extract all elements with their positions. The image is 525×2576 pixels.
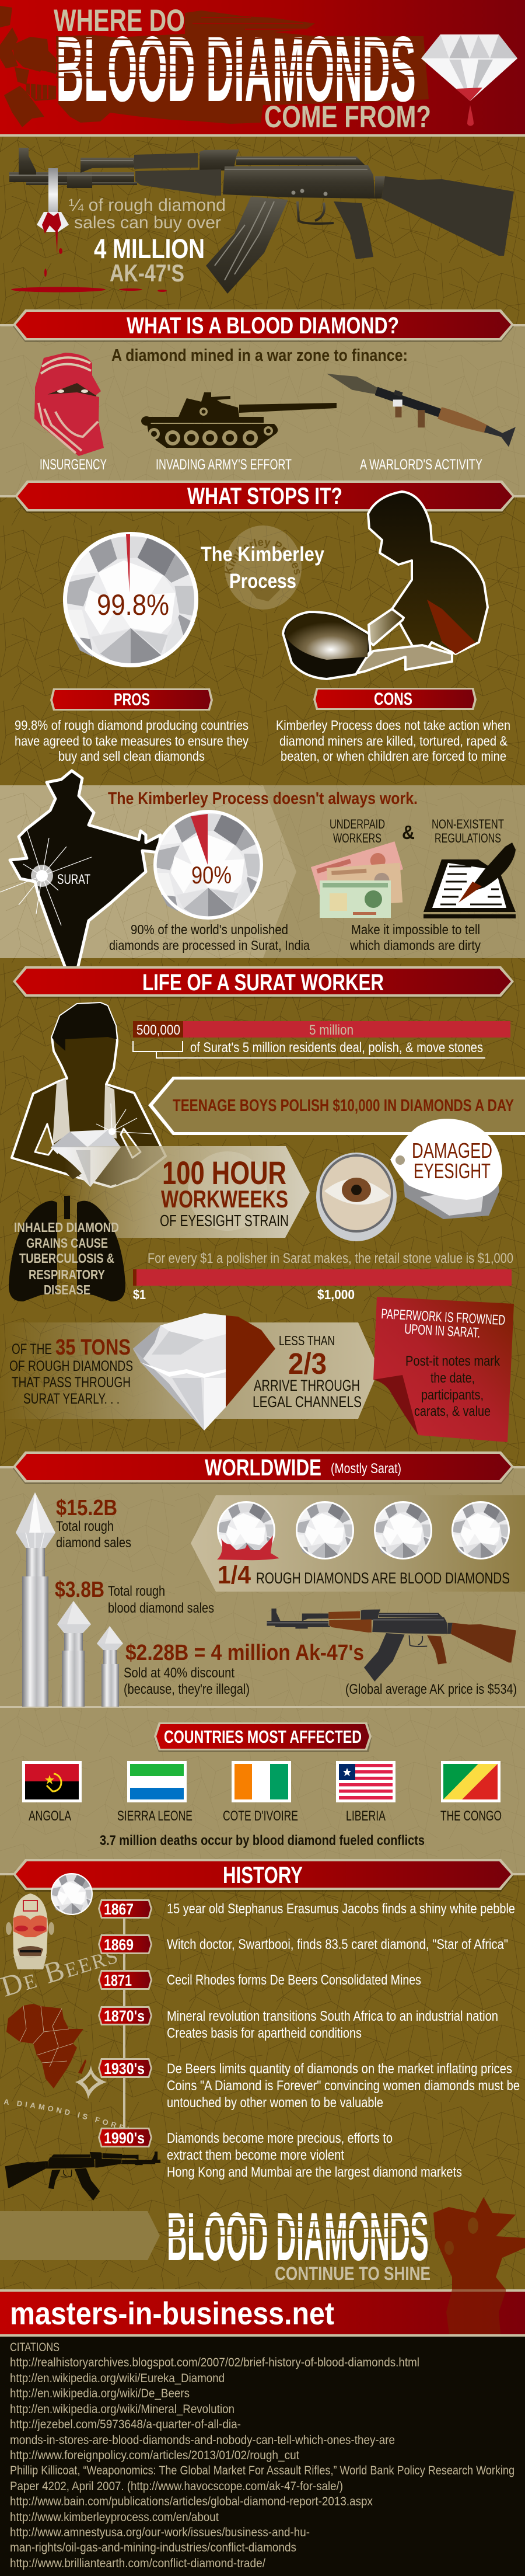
caption: impossible to tell <box>349 922 481 953</box>
callout: sticky note on paperwork: UPON IN SARAT. <box>404 1321 481 1341</box>
caption: 90% processed in surat: diamonds are processed in Surat, India <box>109 938 310 953</box>
chart: 500,000 of 5 million: 5 million <box>309 1022 354 1038</box>
caption: three uses: INVADING ARMY'S EFFORT <box>156 457 292 473</box>
timeline: 1990's: 1990's <box>104 2129 145 2147</box>
banner: worldwide: WORLDWIDE <box>205 1455 321 1481</box>
timeline: 1871: 1871 <box>104 1972 132 1989</box>
stat: diamond sales text: diamond sales <box>56 1535 131 1551</box>
icon: small diamond <box>51 1874 92 1914</box>
callout: sticky note on paperwork: carats, & value <box>414 1404 491 1419</box>
callout: sticky note on paperwork: Post-it notes mark <box>405 1353 501 1369</box>
banner: countries most affected: COUNTRIES MOST AFFECTED <box>164 1726 362 1747</box>
icon: bleeding diamond <box>421 34 517 126</box>
timeline: 1990's: Hong Kong and Mumbai are the largest diamond markets <box>167 2164 462 2180</box>
labels: underpaid workers and regulations: UNDERPAID <box>330 817 385 831</box>
banner: what stops it <box>15 481 515 513</box>
citations: Paper 4202, April 2007. (http://www.havocscope.com/ak-47-for-sale/) <box>10 2480 343 2493</box>
flag: the congo <box>440 1761 502 1824</box>
caption: 90% processed in surat <box>109 922 310 953</box>
footer banner: masters-in-business.net <box>10 2295 334 2331</box>
timeline: 1930's: untouched by other women to be valuable <box>167 2095 383 2111</box>
panel: 35 tons, less than 2/3: SURAT YEARLY. . . <box>23 1391 120 1407</box>
panel: 35 tons, less than 2/3: LEGAL CHANNELS <box>253 1393 362 1411</box>
callout: 100 hour workweeks: OF EYESIGHT STRAIN <box>160 1212 289 1230</box>
hero text: AK-47'S <box>110 259 184 287</box>
timeline: 1869: 1869 <box>104 1936 134 1954</box>
icon: lungs with text <box>9 1196 125 1301</box>
icon: worker silhouette holding diamond <box>12 1003 166 1187</box>
labels: underpaid workers and regulations: REGULATIONS <box>435 831 501 845</box>
timeline: 1990's <box>98 2128 462 2180</box>
map: india with surat burst: SURAT <box>57 872 90 887</box>
heading: the kimberley process: Process <box>229 570 296 593</box>
banner: what stops it: WHAT STOPS IT? <box>187 483 342 509</box>
stat: diamond sales text: Total rough <box>108 1583 165 1599</box>
flag: the congo: THE CONGO <box>440 1808 502 1824</box>
kimberley process seal: Kimberley Process <box>224 538 300 575</box>
citations: http://www.kimberleyprocess.com/en/about <box>10 2511 219 2524</box>
panel: cons <box>276 688 510 764</box>
panel: kimberley process fails: The Kimberley Process doesn't always work. <box>108 789 418 808</box>
citations <box>0 2337 525 2576</box>
icon: lungs with text: RESPIRATORY <box>29 1267 105 1282</box>
hero: AK-47 illustration <box>9 148 514 294</box>
icon: four point diamond star <box>75 2065 107 2099</box>
citations: http://jezebel.com/5973648/a-quarter-of-all-dia- <box>10 2418 241 2431</box>
section background: what is a blood diamond <box>0 324 525 497</box>
flag: sierra leone: SIERRA LEONE <box>117 1808 192 1824</box>
stat: diamond sales text: Total rough <box>56 1519 114 1534</box>
icon: tribal mask <box>6 1893 54 1969</box>
caption: three uses <box>40 457 482 473</box>
icon: jeweller's loupe with eye <box>316 1119 502 1241</box>
icon: child panning silhouette <box>283 492 488 679</box>
banner: history <box>13 1859 514 1892</box>
citations: http://realhistoryarchives.blogspot.com/2007/02/brief-history-of-blood-diamonds.html <box>10 2356 419 2369</box>
icon: 90% diamond: 90% <box>191 861 232 889</box>
icon: lungs with text: GRAINS CAUSE <box>26 1235 108 1251</box>
panel: 35 tons, less than 2/3: LESS THAN <box>279 1333 335 1348</box>
callout: sticky note on paperwork: participants, <box>421 1387 484 1403</box>
caption: three uses: INSURGENCY <box>40 457 107 473</box>
icon: lungs with text: DISEASE <box>44 1282 90 1297</box>
panel: 35 tons, less than 2/3: 2/3 <box>288 1347 327 1380</box>
timeline: 1869 <box>98 1934 508 1954</box>
icon: 90% diamond <box>155 812 262 918</box>
citations: http://www.foreignpolicy.com/articles/2013/01/02/rough_cut <box>10 2449 299 2462</box>
timeline: 1870's <box>98 2006 498 2041</box>
chart: $1 vs $1,000 <box>133 1251 513 1302</box>
banner: what is a blood diamond <box>13 309 514 342</box>
caption: impossible to tell: Make it impossible to tell <box>351 922 480 937</box>
callout: 100 hour workweeks: WORKWEEKS <box>161 1185 288 1213</box>
citations: http://www.brilliantearth.com/conflict-diamond-trade/ <box>10 2557 265 2570</box>
timeline: 1867: 1867 <box>104 1900 134 1918</box>
panel: 35 tons, less than 2/3: THAT PASS THROUGH <box>12 1374 131 1391</box>
banner: countries most affected <box>154 1722 372 1752</box>
caption: 90% processed in surat: 90% of the world's unpolished <box>131 922 288 937</box>
title <box>54 4 431 134</box>
closing title: CONTINUE TO SHINE <box>275 2263 430 2284</box>
stat: 3.7 million deaths: 3.7 million deaths occur by blood diamond fueled conflicts <box>100 1833 425 1849</box>
panel: kimberley process fails <box>0 785 525 958</box>
icon: rupee notes <box>311 841 403 918</box>
panel: 35 tons, less than 2/3: OF THE <box>12 1341 52 1357</box>
icon: lungs with text: TUBERCULOSIS & <box>19 1251 114 1266</box>
title: WHERE DO <box>54 4 185 38</box>
timeline: 1871 <box>98 1970 421 1990</box>
chart: diamond-tipped bullets <box>16 1492 123 1707</box>
icon: colored AK-47 <box>267 1609 516 1682</box>
heading: the kimberley process: The Kimberley <box>201 543 324 566</box>
stat: diamond sales text: $15.2B <box>56 1496 117 1520</box>
arc text: a diamond is forever <box>4 2100 129 2128</box>
stat: diamond sales text: $3.8B <box>55 1578 104 1602</box>
stat: diamond sales text: $2.28B = 4 million Ak-47's <box>125 1641 364 1665</box>
arc text: a diamond is forever: A DIAMOND IS FOREVER <box>4 2100 129 2128</box>
panel: 35 tons, less than 2/3: OF ROUGH DIAMONDS <box>9 1358 133 1374</box>
chart: $1 vs $1,000: $1 <box>133 1287 146 1302</box>
citations: http://en.wikipedia.org/wiki/Eureka_Diamond <box>10 2372 225 2385</box>
icon: jeweller's loupe with eye: EYESIGHT <box>414 1159 491 1183</box>
section background: worldwide <box>0 1466 525 1875</box>
panel: pros <box>15 688 249 764</box>
citations: man-rights/oil-gas-and-mining-industries/conflict-diamonds <box>10 2541 296 2554</box>
panel: pros: PROS <box>114 690 150 709</box>
timeline: 1870's: Creates basis for apartheid conditions <box>167 2025 362 2041</box>
callout: sticky note on paperwork: the date, <box>430 1370 475 1386</box>
hero text <box>69 196 226 287</box>
caption: three uses: A WARLORD'S ACTIVITY <box>360 457 482 473</box>
icon: black AK silhouette <box>5 2152 160 2201</box>
icon: rocket launcher <box>320 363 516 458</box>
banner: life of a surat worker: LIFE OF A SURAT WORKER <box>142 970 384 995</box>
chart: 500,000 of 5 million: 500,000 <box>136 1022 180 1038</box>
flag: cote d'ivoire: COTE D'IVOIRE <box>223 1808 298 1824</box>
arrow: bottom tan pointer <box>0 2211 160 2260</box>
subheading: a diamond mined: A diamond mined in a war zone to finance: <box>111 346 408 365</box>
banner: worldwide <box>13 1451 514 1484</box>
timeline: 1867 <box>98 1899 515 1919</box>
panel: one in four diamonds: 1/4 <box>218 1561 251 1589</box>
citations: http://en.wikipedia.org/wiki/Mineral_Revolution <box>10 2403 235 2416</box>
callout: sticky note on paperwork <box>373 1297 514 1442</box>
panel: pros: buy and sell clean diamonds <box>58 749 205 764</box>
panel: 35 tons, less than 2/3 <box>0 1313 379 1430</box>
callout: 100 hour workweeks <box>64 1146 310 1238</box>
caption: impossible to tell: which diamonds are dirty <box>349 938 481 953</box>
labels: underpaid workers and regulations: & <box>402 821 415 843</box>
hero text: sales can buy over <box>74 213 221 232</box>
panel: one in four diamonds <box>191 1495 525 1592</box>
timeline: 1930's <box>98 2058 520 2111</box>
citations: CITATIONS <box>10 2341 60 2354</box>
title: COME FROM? <box>264 100 431 134</box>
callout: 100 hour workweeks: 100 HOUR <box>162 1154 286 1191</box>
de beers wordmark: De Beers <box>0 1937 121 2003</box>
flag: angola: ANGOLA <box>29 1808 71 1824</box>
stat: diamond sales text: blood diamond sales <box>108 1600 214 1616</box>
banner: worldwide: (Mostly Sarat) <box>331 1461 401 1477</box>
header banner <box>0 0 525 137</box>
hero text: ¼ of rough diamond <box>69 196 226 215</box>
hero text: 4 MILLION <box>94 233 205 264</box>
icon: africa map <box>6 2004 86 2088</box>
citations: monds-in-stores-are-blood-diamonds-and-nobody-can-tell-which-ones-they-are <box>10 2434 395 2447</box>
panel: cons: CONS <box>374 690 412 709</box>
stat: diamond sales text: Sold at 40% discount <box>124 1665 235 1681</box>
timeline: 1930's: 1930's <box>104 2060 145 2077</box>
icon: tank <box>141 392 337 448</box>
citations: http://www.amnestyusa.org/our-work/issues/business-and-hu- <box>10 2526 310 2539</box>
labels: underpaid workers and regulations: WORKERS <box>333 831 382 845</box>
heading: the kimberley process <box>201 543 324 593</box>
flag: sierra leone <box>117 1761 192 1824</box>
banner: what is a blood diamond: WHAT IS A BLOOD DIAMOND? <box>127 313 399 339</box>
kimberley process seal <box>224 525 302 610</box>
labels: underpaid workers and regulations: NON-EXISTENT <box>432 817 504 831</box>
icon: bleeding needle <box>11 168 167 292</box>
flag: liberia: LIBERIA <box>346 1808 386 1824</box>
flag: cote d'ivoire <box>223 1761 298 1824</box>
map: india with surat burst <box>0 771 160 972</box>
banner: life of a surat worker <box>13 966 514 998</box>
timeline: 1990's: Diamonds become more precious, efforts to <box>167 2131 393 2146</box>
icon: 99.8% diamond <box>64 534 197 666</box>
banner: history: HISTORY <box>223 1863 303 1888</box>
icon: masked insurgent <box>34 353 104 456</box>
chart: 500,000 of 5 million <box>133 1021 510 1058</box>
icon: jeweller's loupe with eye: DAMAGED <box>412 1139 492 1162</box>
flag: angola <box>22 1761 82 1824</box>
icon: lungs with text: INHALED DIAMOND <box>14 1220 119 1235</box>
blood splatter <box>433 2197 525 2334</box>
callout: teenage boys <box>148 1077 525 1135</box>
citations: http://en.wikipedia.org/wiki/De_Beers <box>10 2387 190 2400</box>
footer banner <box>0 2289 525 2337</box>
panel: 35 tons, less than 2/3: ARRIVE THROUGH <box>254 1377 360 1394</box>
labels: underpaid workers and regulations <box>330 817 504 845</box>
timeline: 1871: Cecil Rhodes forms De Beers Consolidated Mines <box>167 1972 421 1988</box>
panel: pros: 99.8% of rough diamond producing countries <box>15 718 249 733</box>
timeline line <box>123 1919 125 2129</box>
timeline: 1870's: 1870's <box>104 2007 145 2025</box>
closing title <box>167 2198 430 2284</box>
panel: pros: have agreed to take measures to ensure they <box>15 733 249 749</box>
citations: http://www.bain.com/publications/articles/global-diamond-report-2013.aspx <box>10 2495 373 2508</box>
stat: diamond sales text <box>55 1496 364 1697</box>
icon: 99.8% diamond: 99.8% <box>97 589 169 621</box>
chart: $1 vs $1,000: $1,000 <box>317 1287 355 1302</box>
timeline: 1990's: extract them become more violent <box>167 2147 344 2163</box>
panel: 35 tons, less than 2/3: 35 TONS <box>55 1335 131 1360</box>
stat: diamond sales text: (because, they're illegal) <box>124 1682 250 1697</box>
flag: liberia <box>336 1761 396 1824</box>
icon: paper and pen <box>424 843 516 918</box>
